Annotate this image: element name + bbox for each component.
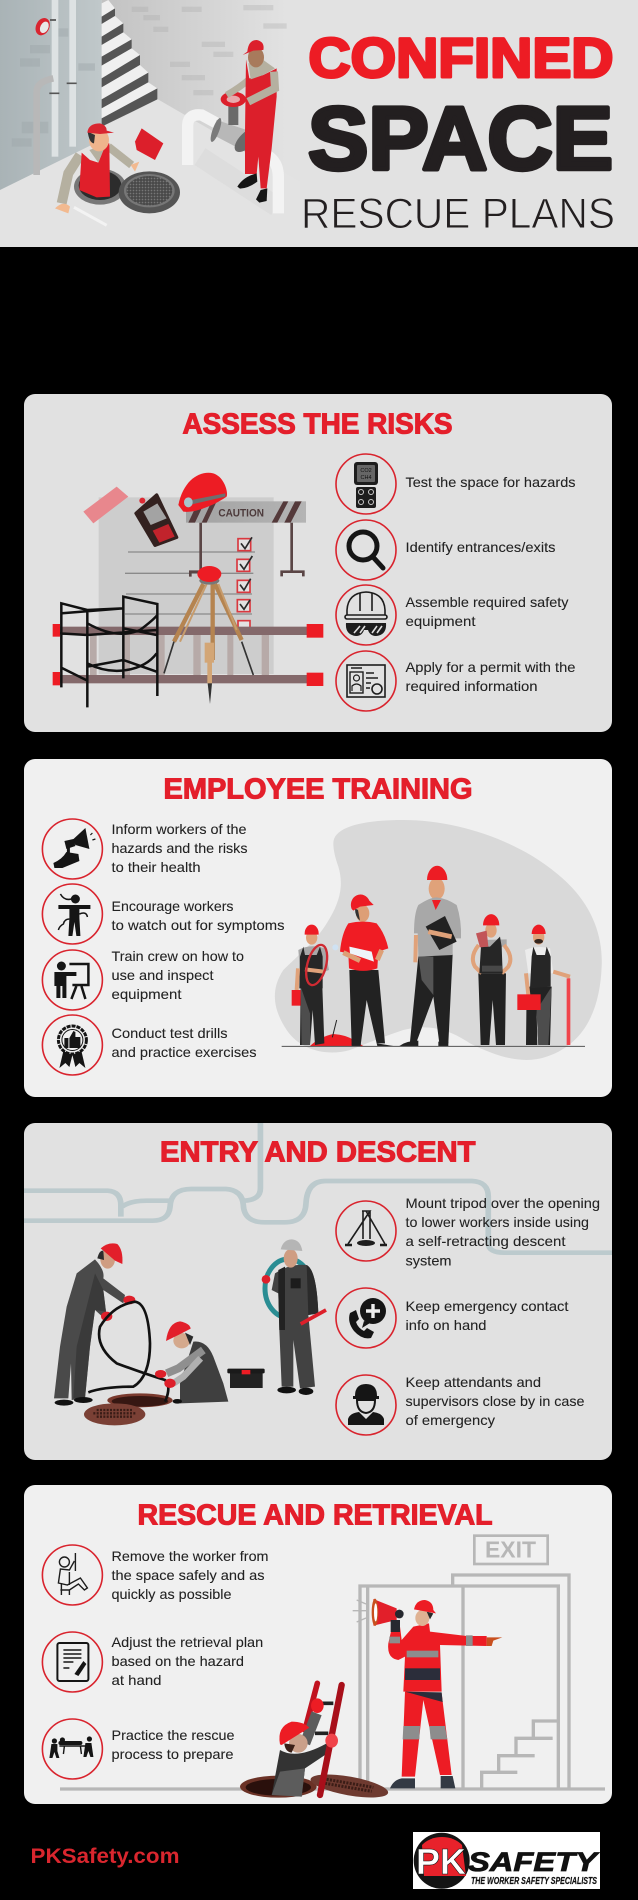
- icon: worker on rope: [42, 1545, 102, 1605]
- worker with teal hose: [262, 1239, 326, 1395]
- text: [112, 1634, 263, 1688]
- text: [406, 1374, 585, 1428]
- text: to watch out for symptoms: [112, 917, 284, 933]
- text: of emergency: [406, 1412, 495, 1428]
- icon: gas monitor: CO2: [360, 468, 372, 474]
- text: system: [406, 1252, 452, 1268]
- item: test the space: [336, 454, 576, 514]
- exit sign: [474, 1536, 548, 1564]
- panel: employee training: [24, 759, 612, 1097]
- text: Inform workers of the: [112, 821, 247, 837]
- caution barrier: CAUTION: [218, 508, 264, 520]
- wall pipes and gauge: [33, 0, 77, 175]
- PK Safety logo: [413, 1832, 601, 1889]
- text: Practice the rescue: [112, 1727, 235, 1743]
- text: Assemble required safety: [406, 594, 568, 610]
- survey tripod: [164, 566, 253, 704]
- worker with hose: [54, 1243, 168, 1406]
- icon: permit card: [336, 651, 396, 711]
- text: supervisors close by in case: [406, 1393, 585, 1409]
- text: quickly as possible: [112, 1586, 232, 1602]
- illustration: checklist, barrier, tripod, ladder and scaffold: [53, 473, 323, 707]
- icon: gas monitor: CH4: [360, 475, 372, 481]
- tall worker with folder: [399, 866, 461, 1046]
- text: [112, 1025, 256, 1060]
- item: test drills: [42, 1015, 257, 1075]
- icon: magnifying glass: [336, 520, 396, 580]
- item: emergency contact: [336, 1288, 569, 1348]
- red toolbox: [135, 128, 163, 160]
- text: the space safely and as: [112, 1567, 264, 1583]
- exit sign: EXIT: [485, 1537, 536, 1563]
- item: supervisors: [336, 1374, 585, 1435]
- icon: gas monitor: [336, 454, 396, 514]
- text: and practice exercises: [112, 1044, 256, 1060]
- text: info on hand: [406, 1317, 486, 1333]
- doorway and stairs: [60, 1575, 605, 1789]
- ladder: [53, 624, 323, 686]
- hard hat: [178, 473, 227, 512]
- text: at hand: [112, 1672, 162, 1688]
- icon: megaphone over shoe: [42, 819, 102, 879]
- text: [112, 898, 284, 933]
- scaffold: [60, 597, 157, 707]
- text: Train crew on how to: [112, 948, 244, 964]
- manhole worker: [55, 123, 180, 225]
- radio: [136, 495, 177, 545]
- illustration: crew of five workers: [275, 820, 602, 1060]
- manhole: [240, 1770, 390, 1802]
- icon: document with pen: [42, 1632, 102, 1692]
- icon: stretcher team: [42, 1719, 102, 1779]
- text: [406, 659, 576, 694]
- item: train crew: [42, 948, 244, 1010]
- icon: supervisor: [336, 1375, 396, 1435]
- title: [301, 26, 615, 238]
- text: equipment: [112, 986, 182, 1002]
- text: a self-retracting descent: [406, 1233, 566, 1249]
- worker in red shirt: [332, 894, 393, 1046]
- text: process to prepare: [112, 1746, 234, 1762]
- text: based on the hazard: [112, 1653, 244, 1669]
- text: Identify entrances/exits: [406, 539, 556, 555]
- title line: CONFINED: CONFINED: [308, 26, 614, 89]
- item: identify entrances: [336, 520, 556, 580]
- pipe with valve: [188, 92, 278, 213]
- text: Keep attendants and: [406, 1374, 541, 1390]
- text: Conduct test drills: [112, 1025, 228, 1041]
- stairs: [102, 0, 157, 127]
- worker with cable: [292, 925, 363, 1046]
- item: adjust plan: [42, 1632, 263, 1692]
- title line: RESCUE PLANS: RESCUE PLANS: [301, 190, 615, 238]
- text: [406, 1298, 569, 1333]
- worker with toolbox and cane: [517, 925, 570, 1045]
- kneeling worker: [155, 1321, 228, 1404]
- text: [406, 594, 568, 629]
- hero banner: [0, 0, 638, 247]
- illustration: workers at manhole: [54, 1239, 326, 1425]
- text: Encourage workers: [112, 898, 234, 914]
- panel: rescue and retrieval: [24, 1485, 612, 1804]
- standing worker: [227, 40, 277, 203]
- text: to their health: [112, 859, 200, 875]
- item: practice rescue: [42, 1719, 235, 1779]
- text: hazards and the risks: [112, 840, 248, 856]
- text: Remove the worker from: [112, 1548, 268, 1564]
- item: inform workers: [42, 819, 248, 879]
- text: to lower workers inside using: [406, 1214, 589, 1230]
- item: permit: [336, 651, 576, 711]
- toolbox: [227, 1369, 265, 1388]
- icon: figure with symptom lines: [42, 884, 102, 944]
- PK Safety logo: SAFETY: [468, 1847, 601, 1877]
- text: Keep emergency contact: [406, 1298, 569, 1314]
- heading: rescue and retrieval: RESCUE AND RETRIEVAL: [138, 1500, 492, 1532]
- text: [112, 1548, 268, 1602]
- worker with hands on hips: [473, 914, 510, 1045]
- item: mount tripod: [336, 1195, 600, 1268]
- title line: SPACE: SPACE: [308, 88, 613, 188]
- caution barrier: [186, 501, 306, 577]
- text: Mount tripod over the opening: [406, 1195, 600, 1211]
- text: Adjust the retrieval plan: [112, 1634, 263, 1650]
- heading: assess the risks: ASSESS THE RISKS: [182, 408, 452, 440]
- panel: assess the risks: [24, 394, 612, 732]
- item: safety equipment: [336, 585, 568, 645]
- text: Apply for a permit with the: [406, 659, 576, 675]
- icon: phone and medical bubble: [336, 1288, 396, 1348]
- illustration: exit door, firefighter and rescued worker: [60, 1536, 605, 1802]
- heading: entry and descent: ENTRY AND DESCENT: [160, 1136, 476, 1168]
- background pipes: [24, 1123, 614, 1253]
- rescued worker on ladder: [272, 1683, 342, 1797]
- firefighter with megaphone: [372, 1599, 502, 1788]
- text: equipment: [406, 613, 476, 629]
- manhole and cover: [84, 1393, 173, 1425]
- PK Safety logo: PK: [416, 1841, 466, 1882]
- text: Test the space for hazards: [406, 474, 576, 490]
- text: [406, 1195, 600, 1268]
- footer url: PKSafety.com: [30, 1845, 180, 1868]
- hero illustration: workers in a confined space: [0, 0, 300, 247]
- icon: tripod: [336, 1201, 396, 1261]
- icon: helmet and goggles: [336, 585, 396, 645]
- text: use and inspect: [112, 967, 214, 983]
- text: [112, 948, 244, 1002]
- panel: entry and descent: [24, 1123, 614, 1460]
- text: [112, 1727, 235, 1762]
- text: required information: [406, 678, 538, 694]
- icon: presenter at easel: [42, 950, 102, 1010]
- item: symptoms: [42, 884, 285, 944]
- icon: badge with thumbs up: [42, 1015, 102, 1075]
- item: remove the worker: [42, 1545, 269, 1605]
- text: [112, 821, 248, 875]
- heading: employee training: EMPLOYEE TRAINING: [164, 774, 472, 806]
